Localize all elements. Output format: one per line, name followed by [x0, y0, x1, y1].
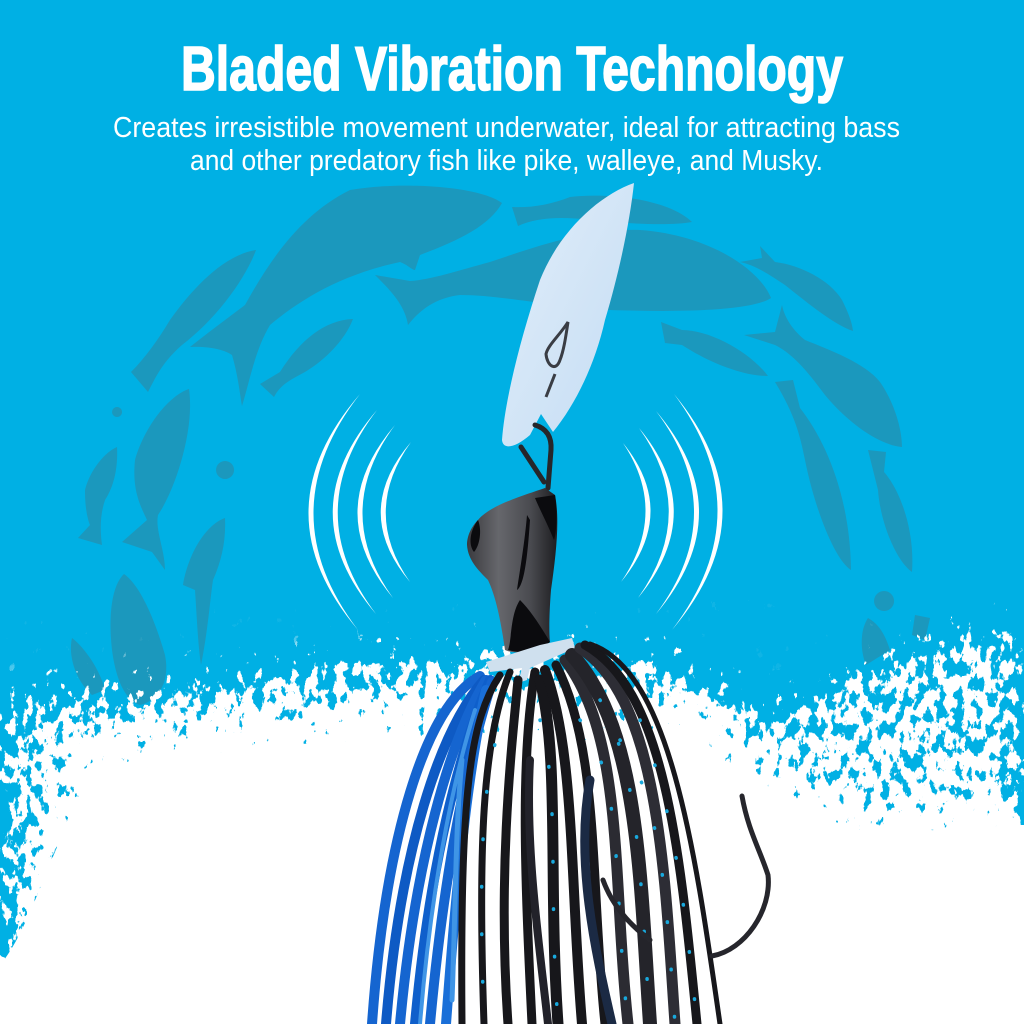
fish: lower left oval [110, 574, 166, 705]
fish: slender left [131, 250, 256, 392]
sound waves left [308, 394, 411, 630]
wire arm [521, 425, 551, 488]
fish: right tall [775, 380, 851, 570]
fish: large centre [375, 230, 771, 325]
fish: centre right small [661, 322, 768, 376]
subtitle line 1: Creates irresistible movement underwater, ideal for attracting bass [113, 112, 900, 144]
title: Bladed Vibration Technology [181, 35, 843, 104]
white splatter water surface [0, 625, 1024, 1024]
subtitle line 2: and other predatory fish like pike, walleye, and Musky. [190, 145, 823, 177]
bubbles and lower right fish [112, 407, 930, 665]
black skirt strands [462, 644, 720, 1024]
fish: top centre [512, 196, 692, 226]
fish: large upper left [190, 186, 502, 406]
spinnerbait lure [372, 183, 768, 1024]
blade [502, 183, 634, 446]
subtitle [113, 112, 900, 177]
fish: bottom left small [71, 638, 105, 695]
fish: right slim [868, 450, 912, 572]
fish school silhouettes [71, 186, 930, 705]
fish: left vertical [183, 518, 225, 665]
sound waves right [621, 394, 723, 630]
fish: small centre left [260, 319, 353, 397]
fish: left tall [122, 389, 190, 570]
blade swivel [546, 322, 568, 397]
fish: upper right small [740, 246, 853, 331]
head details [471, 495, 557, 652]
skirt collar [486, 638, 575, 683]
skirt glitter [482, 700, 697, 1024]
lead head [467, 488, 557, 652]
fish: right large [744, 305, 902, 447]
trailing hook [603, 796, 768, 956]
solid white lower water [0, 740, 1024, 1024]
blue skirt strands [372, 676, 492, 1024]
fish: far left small [78, 447, 117, 545]
